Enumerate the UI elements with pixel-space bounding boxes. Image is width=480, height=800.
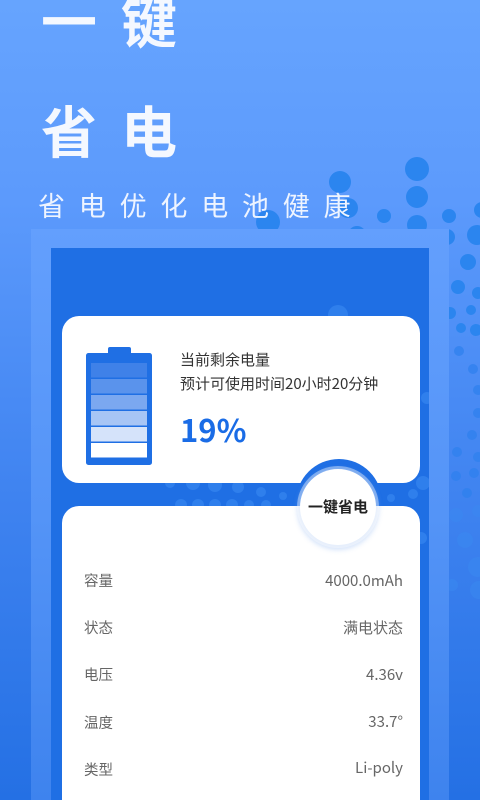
row: status: 满电状态 [343,617,403,638]
row: voltage [84,664,403,685]
row: type: 类型 [84,759,113,780]
inner dots [165,305,429,544]
row: capacity [84,570,403,591]
row: temperature [84,711,403,733]
title: 一键省电: 省电 [41,89,201,170]
row: voltage: 4.36v [366,664,403,685]
panel: battery card [62,316,420,483]
row: type [84,757,403,780]
row: voltage: 电压 [84,664,113,685]
row: capacity: 4000.0mAh [325,570,403,591]
text: battery remaining: 当前剩余电量 [180,349,270,370]
row: capacity: 容量 [84,570,113,591]
button: one-tap power saving [295,459,381,552]
white button circle [300,469,376,545]
panel: outer frame [31,229,449,800]
title: 一键省电 [41,0,201,170]
row: temperature: 33.7° [368,711,403,732]
row: status: 状态 [84,617,113,638]
icon: battery [86,347,152,465]
percentage 19%: 19% [180,406,246,451]
row: temperature: 温度 [84,712,113,733]
white button circle: 一键省电 [308,496,368,517]
text: battery remaining: 预计可使用时间20小时20分钟 [180,373,378,394]
subtitle: 省电优化电池健康 [38,185,364,224]
row: status [84,617,403,638]
panel: inner blue screen [51,248,429,800]
row: type: Li-poly [355,757,403,778]
panel: battery details card [62,506,420,800]
blue arc ring [300,459,378,483]
text: battery remaining [180,349,378,394]
